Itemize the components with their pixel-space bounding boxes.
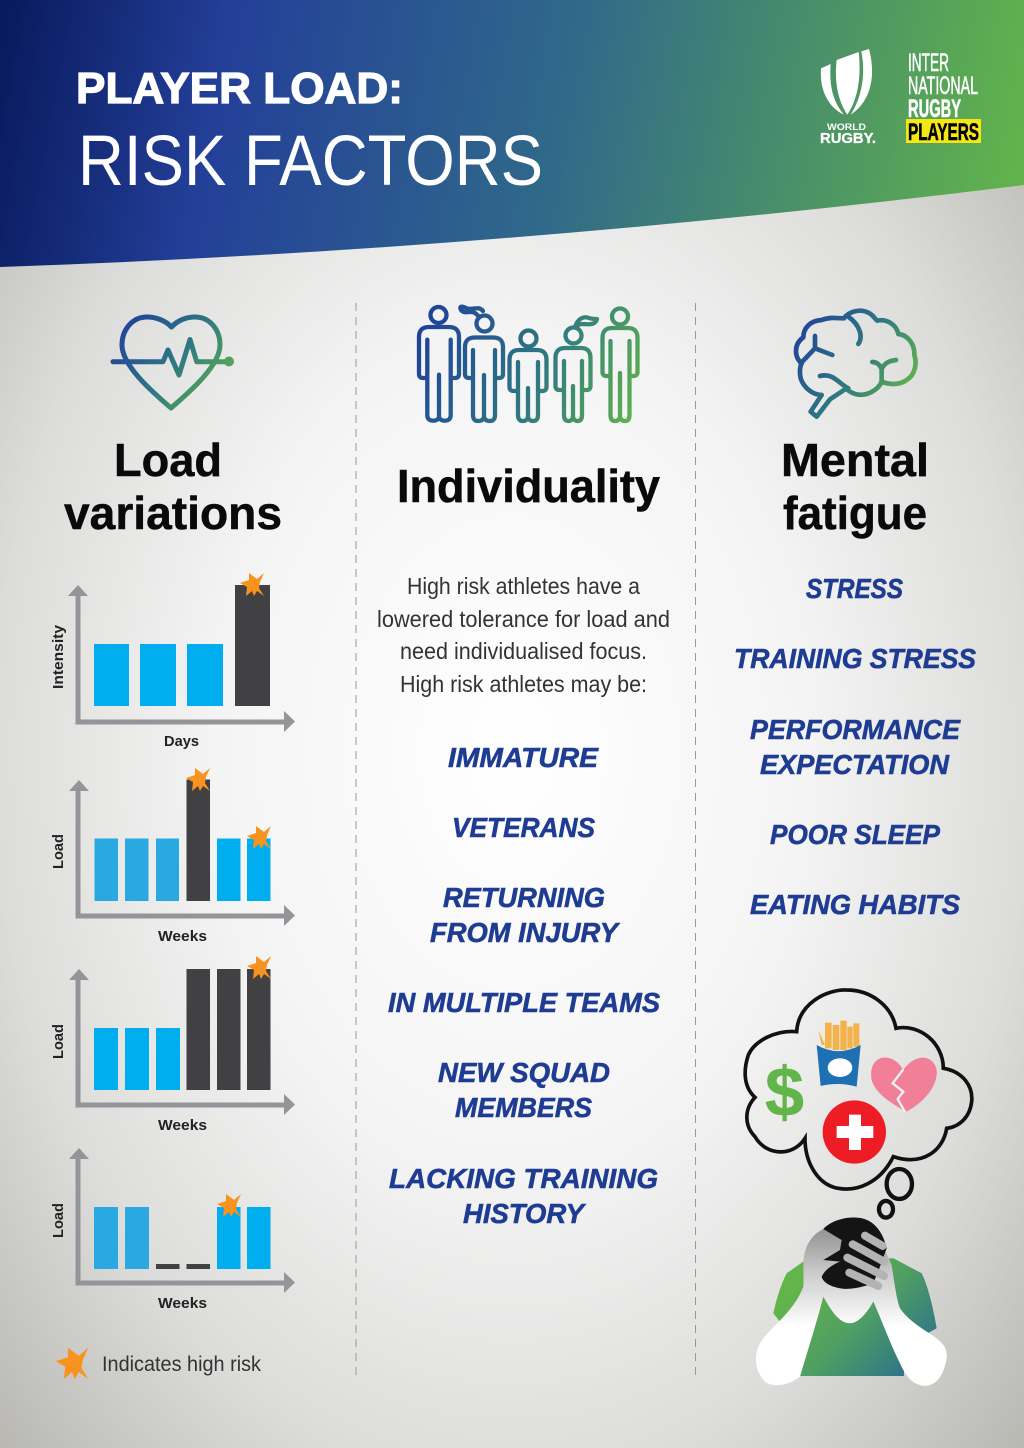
chart: sustained high load	[51, 956, 295, 1134]
icon: fries	[817, 1021, 861, 1087]
list: high risk athlete types: IMMATURE	[448, 742, 599, 773]
heading: Load variations: variations	[64, 487, 282, 539]
text block: high risk athletes intro	[377, 573, 670, 697]
axis label: Days: Days	[164, 734, 199, 750]
icon: brain	[796, 311, 916, 417]
text block: high risk athletes intro: lowered tolerance for load and	[377, 606, 670, 632]
text block: high risk athletes intro: need individualised focus.	[400, 638, 647, 664]
title	[76, 64, 543, 201]
title: RISK FACTORS	[78, 122, 543, 201]
illustration: stressed person	[756, 1218, 947, 1386]
axis label: Load: Load	[51, 834, 67, 869]
icon: group of five people	[419, 307, 638, 421]
title: PLAYER LOAD:	[76, 64, 403, 113]
logo: World Rugby: RUGBY.	[820, 130, 876, 147]
axis label: Intensity: Intensity	[51, 625, 67, 689]
list: mental fatigue causes	[734, 573, 976, 920]
logo: International Rugby Players: RUGBY	[908, 95, 961, 123]
heading: Mental fatigue: fatigue	[783, 487, 927, 539]
heading: Individuality: Individuality	[397, 460, 660, 512]
list: high risk athlete types: LACKING TRAINING	[389, 1163, 658, 1194]
logo: International Rugby Players	[906, 49, 981, 146]
icon: high risk star	[247, 956, 271, 979]
list: mental fatigue causes: POOR SLEEP	[770, 819, 940, 850]
list: high risk athlete types: VETERANS	[452, 812, 595, 843]
logo: World Rugby: WORLD	[827, 122, 866, 133]
icon: broken heart	[871, 1058, 937, 1112]
list: mental fatigue causes: TRAINING STRESS	[734, 643, 976, 674]
chart: return after a break	[51, 1148, 295, 1312]
icon: high risk star	[217, 1194, 241, 1217]
list: mental fatigue causes: EATING HABITS	[750, 889, 960, 920]
list: mental fatigue causes: STRESS	[806, 573, 903, 604]
list: high risk athlete types: FROM INJURY	[430, 917, 620, 948]
list: high risk athlete types: HISTORY	[463, 1198, 586, 1229]
list: high risk athlete types	[388, 742, 660, 1229]
axis label: Weeks: Weeks	[158, 929, 207, 945]
icon: high risk star	[186, 768, 210, 791]
heading: Load variations	[64, 434, 282, 539]
list: high risk athlete types: MEMBERS	[455, 1092, 592, 1123]
chart: load spike over weeks	[51, 768, 295, 945]
axis label: Load: Load	[51, 1024, 67, 1059]
icon: high risk star	[240, 573, 264, 596]
axis label: Weeks: Weeks	[158, 1118, 207, 1134]
icon: high risk star	[247, 826, 271, 849]
icon: medical cross	[823, 1100, 886, 1164]
icon: dollar sign: $	[765, 1053, 804, 1131]
list: mental fatigue causes: PERFORMANCE	[750, 714, 961, 745]
icon: heart with pulse	[113, 317, 232, 408]
list: high risk athlete types: IN MULTIPLE TEAMS	[388, 987, 660, 1018]
heading: Mental fatigue: Mental	[781, 434, 929, 486]
text block: high risk athletes intro: High risk athletes may be:	[400, 671, 647, 697]
header banner	[0, 0, 1024, 267]
heading: Load variations: Load	[114, 434, 222, 486]
legend: high risk star: Indicates high risk	[102, 1353, 261, 1376]
chart: intensity over days	[51, 573, 295, 750]
axis label: Load: Load	[51, 1203, 67, 1238]
list: mental fatigue causes: EXPECTATION	[760, 749, 950, 780]
list: high risk athlete types: NEW SQUAD	[438, 1057, 610, 1088]
heading: Mental fatigue	[781, 434, 929, 539]
legend: high risk star	[56, 1348, 261, 1379]
text block: high risk athletes intro: High risk athletes have a	[407, 573, 640, 599]
logo: World Rugby	[820, 49, 876, 147]
illustration: thought bubble	[745, 990, 972, 1218]
logo: International Rugby Players: PLAYERS	[908, 119, 979, 146]
axis label: Weeks: Weeks	[158, 1296, 207, 1312]
list: high risk athlete types: RETURNING	[443, 882, 605, 913]
logo: International Rugby Players: INTER	[908, 49, 949, 77]
